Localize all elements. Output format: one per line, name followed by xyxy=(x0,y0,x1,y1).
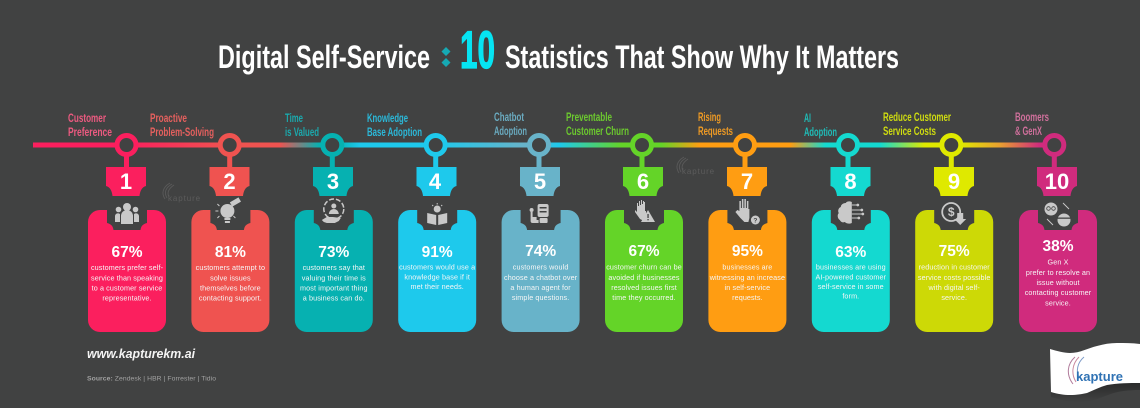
icon: open book with sun xyxy=(427,203,447,225)
panel: card 9 reduce customer service costs: service. xyxy=(941,293,967,302)
icon: light bulb and wrench xyxy=(215,197,241,223)
icon: hand and warning sign xyxy=(635,200,655,222)
panel: card 3 time is valued: customers say that xyxy=(303,263,365,272)
label: Proactive Problem-Solving: Proactive xyxy=(150,111,187,125)
label: AI Adoption: AI xyxy=(804,111,811,125)
label: Customer Preference: Customer xyxy=(68,111,106,125)
label: Preventable Customer Churn xyxy=(566,110,629,138)
panel: card 2 proactive problem-solving: customers attempt to xyxy=(196,263,265,272)
icon: dollar with down arrow: $ xyxy=(948,205,955,219)
title xyxy=(218,21,899,80)
title: 10 xyxy=(460,21,495,80)
panel: card 3 time is valued: 73% xyxy=(318,244,350,261)
step 1 node and number xyxy=(106,136,146,196)
step 5 node and number xyxy=(520,136,560,196)
step 8 node and number: 8 xyxy=(844,169,857,194)
panel: card 6 preventable customer churn xyxy=(605,200,683,332)
panel: card 10 boomers and GenX: service. xyxy=(1045,298,1071,308)
panel: card 7 rising requests: 95% xyxy=(732,243,763,260)
label: Customer Preference: Preference xyxy=(68,125,112,139)
label: Knowledge Base Adoption: Base Adoption xyxy=(367,125,422,139)
step 6 node and number: 6 xyxy=(637,169,649,194)
panel: card 6 preventable customer churn: resolved issues first xyxy=(611,283,677,292)
panel: card 10 boomers and GenX: Gen X xyxy=(1048,258,1069,266)
panel: card 1 customer preference xyxy=(88,203,166,332)
step 9 node and number xyxy=(934,136,974,196)
panel: card 2 proactive problem-solving: 81% xyxy=(215,244,246,261)
label: Time is Valued xyxy=(285,111,319,139)
label: Rising Requests: Requests xyxy=(698,124,733,138)
panel: card 4 knowledge base adoption: met their needs. xyxy=(410,282,464,291)
label: Knowledge Base Adoption xyxy=(367,111,422,139)
panel: card 2 proactive problem-solving: solve issues xyxy=(210,273,251,282)
step 6 node and number xyxy=(623,136,663,196)
label: Boomers & GenX: Boomers xyxy=(1015,110,1049,124)
step 4 node and number: 4 xyxy=(429,169,442,194)
panel: card 5 chatbot adoption: choose a chatbot over xyxy=(504,273,578,282)
label: Preventable Customer Churn: Preventable xyxy=(566,110,612,124)
step 4 node and number xyxy=(416,136,456,196)
panel: card 4 knowledge base adoption: customers would use a xyxy=(399,262,475,272)
website url: www.kapturekm.ai xyxy=(87,346,195,361)
panel: card 1 customer preference: representative. xyxy=(102,294,152,302)
panel: card 1 customer preference: to a customer service xyxy=(92,284,162,292)
panel: card 1 customer preference: service than speaking xyxy=(91,273,163,282)
label: Chatbot Adoption: Adoption xyxy=(494,124,527,138)
panel: card 8 AI adoption: AI-powered customer xyxy=(816,272,887,282)
label: Proactive Problem-Solving xyxy=(150,111,214,139)
label: Reduce Customer Service Costs: Reduce Customer xyxy=(883,110,951,124)
panel: card 3 time is valued xyxy=(295,199,373,332)
label: Customer Preference xyxy=(68,111,112,139)
panel: card 9 reduce customer service costs: with digital self- xyxy=(928,283,980,292)
label: AI Adoption xyxy=(804,111,837,139)
icon: hand and question mark: ? xyxy=(753,218,757,224)
panel: card 9 reduce customer service costs: 75% xyxy=(939,243,970,260)
panel: card 10 boomers and GenX: contacting customer xyxy=(1025,288,1092,297)
icon: group of people xyxy=(115,203,139,224)
panel: card 4 knowledge base adoption: 91% xyxy=(422,244,453,261)
watermark: kapture: kapture xyxy=(682,167,715,176)
step 3 node and number: 3 xyxy=(327,169,339,194)
step 5 node and number: 5 xyxy=(534,169,546,194)
label: Rising Requests xyxy=(698,110,733,138)
panel: card 8 AI adoption: 63% xyxy=(835,244,867,261)
panel: card 2 proactive problem-solving: contacting support. xyxy=(199,294,262,302)
source line: Source: Zendesk | HBR | Forrester | Tidio xyxy=(87,376,216,382)
panel: card 7 rising requests xyxy=(708,199,786,332)
title: Statistics That Show Why It Matters xyxy=(505,39,899,75)
label: Time is Valued: Time xyxy=(285,111,303,125)
step 2 node and number xyxy=(210,136,250,196)
panel: card 6 preventable customer churn: 67% xyxy=(628,243,660,260)
step 1 node and number: 1 xyxy=(120,169,132,194)
panel: card 8 AI adoption: form. xyxy=(842,292,859,300)
panel: card 7 rising requests: witnessing an increase xyxy=(709,273,785,282)
logo: kapture flag: kapture xyxy=(1076,369,1123,384)
label: Time is Valued: is Valued xyxy=(285,125,319,139)
logo: kapture flag xyxy=(1050,343,1140,402)
panel: card 6 preventable customer churn: time they occurred. xyxy=(612,293,676,302)
label: Boomers & GenX xyxy=(1015,110,1049,138)
step 3 node and number xyxy=(313,136,353,196)
panel: card 7 rising requests: in self-service xyxy=(725,283,770,292)
panel: card 3 time is valued: a business can do. xyxy=(303,294,365,302)
label: Reduce Customer Service Costs: Service Costs xyxy=(883,124,936,138)
watermark: kapture xyxy=(677,157,715,176)
panel: card 4 knowledge base adoption xyxy=(398,203,476,332)
step 2 node and number: 2 xyxy=(223,169,236,194)
panel: card 9 reduce customer service costs: reduction in customer xyxy=(919,262,990,272)
step 8 node and number xyxy=(830,136,870,196)
panel: card 3 time is valued: valuing their time is xyxy=(302,273,366,282)
label: Preventable Customer Churn: Customer Churn xyxy=(566,124,629,138)
watermark: kapture: kapture xyxy=(168,194,201,203)
panel: card 2 proactive problem-solving xyxy=(191,197,269,332)
panel: card 3 time is valued: most important thing xyxy=(300,284,368,292)
panel: card 10 boomers and GenX: prefer to resolve an xyxy=(1026,268,1090,277)
panel: card 5 chatbot adoption: customers would xyxy=(513,262,568,272)
step 10 node and number: 10 xyxy=(1045,169,1069,194)
icon: AI brain circuit xyxy=(838,201,864,224)
title: Digital Self-Service xyxy=(218,39,430,75)
step 9 node and number: 9 xyxy=(948,169,960,194)
label: Rising Requests: Rising xyxy=(698,110,721,124)
icon: chatbot xyxy=(530,204,549,223)
panel: card 1 customer preference: customers prefer self- xyxy=(91,263,164,272)
panel: card 7 rising requests: requests. xyxy=(732,293,763,302)
panel: card 1 customer preference: 67% xyxy=(111,244,143,261)
step 10 node and number xyxy=(1037,136,1077,196)
panel: card 4 knowledge base adoption: knowledge base if it xyxy=(404,272,470,282)
panel: card 8 AI adoption: businesses are using xyxy=(816,262,886,272)
panel: card 2 proactive problem-solving: themselves before xyxy=(200,284,261,292)
label: Chatbot Adoption xyxy=(494,110,527,138)
label: Proactive Problem-Solving: Problem-Solving xyxy=(150,125,214,139)
label: AI Adoption: Adoption xyxy=(804,125,837,139)
step 7 node and number: 7 xyxy=(741,169,753,194)
step 7 node and number xyxy=(727,136,767,196)
panel: card 9 reduce customer service costs: service costs possible xyxy=(918,273,990,282)
panel: card 10 boomers and GenX xyxy=(1019,202,1097,332)
label: Knowledge Base Adoption: Knowledge xyxy=(367,111,408,125)
panel: card 10 boomers and GenX: 38% xyxy=(1042,238,1074,255)
icon: person in circle over hand xyxy=(322,199,344,223)
panel: card 6 preventable customer churn: avoided if businesses xyxy=(608,273,680,282)
label: Chatbot Adoption: Chatbot xyxy=(494,110,524,124)
panel: card 8 AI adoption xyxy=(812,201,890,332)
panel: card 5 chatbot adoption: simple questions. xyxy=(512,293,569,302)
panel: card 5 chatbot adoption: 74% xyxy=(525,243,556,260)
panel: card 8 AI adoption: self-service in some xyxy=(818,282,884,291)
panel: card 6 preventable customer churn: customer churn can be xyxy=(606,262,682,272)
panel: card 7 rising requests: businesses are xyxy=(722,262,772,272)
timeline line xyxy=(33,142,1054,148)
panel: card 10 boomers and GenX: issue without xyxy=(1036,278,1080,287)
panel: card 5 chatbot adoption: a human agent for xyxy=(510,283,571,292)
panel: card 9 reduce customer service costs xyxy=(915,203,993,332)
watermark: kapture xyxy=(163,183,201,203)
panel: card 5 chatbot adoption xyxy=(502,204,580,332)
icon: older and younger person xyxy=(1044,202,1071,226)
label: Reduce Customer Service Costs xyxy=(883,110,951,138)
label: Boomers & GenX: & GenX xyxy=(1015,124,1042,138)
